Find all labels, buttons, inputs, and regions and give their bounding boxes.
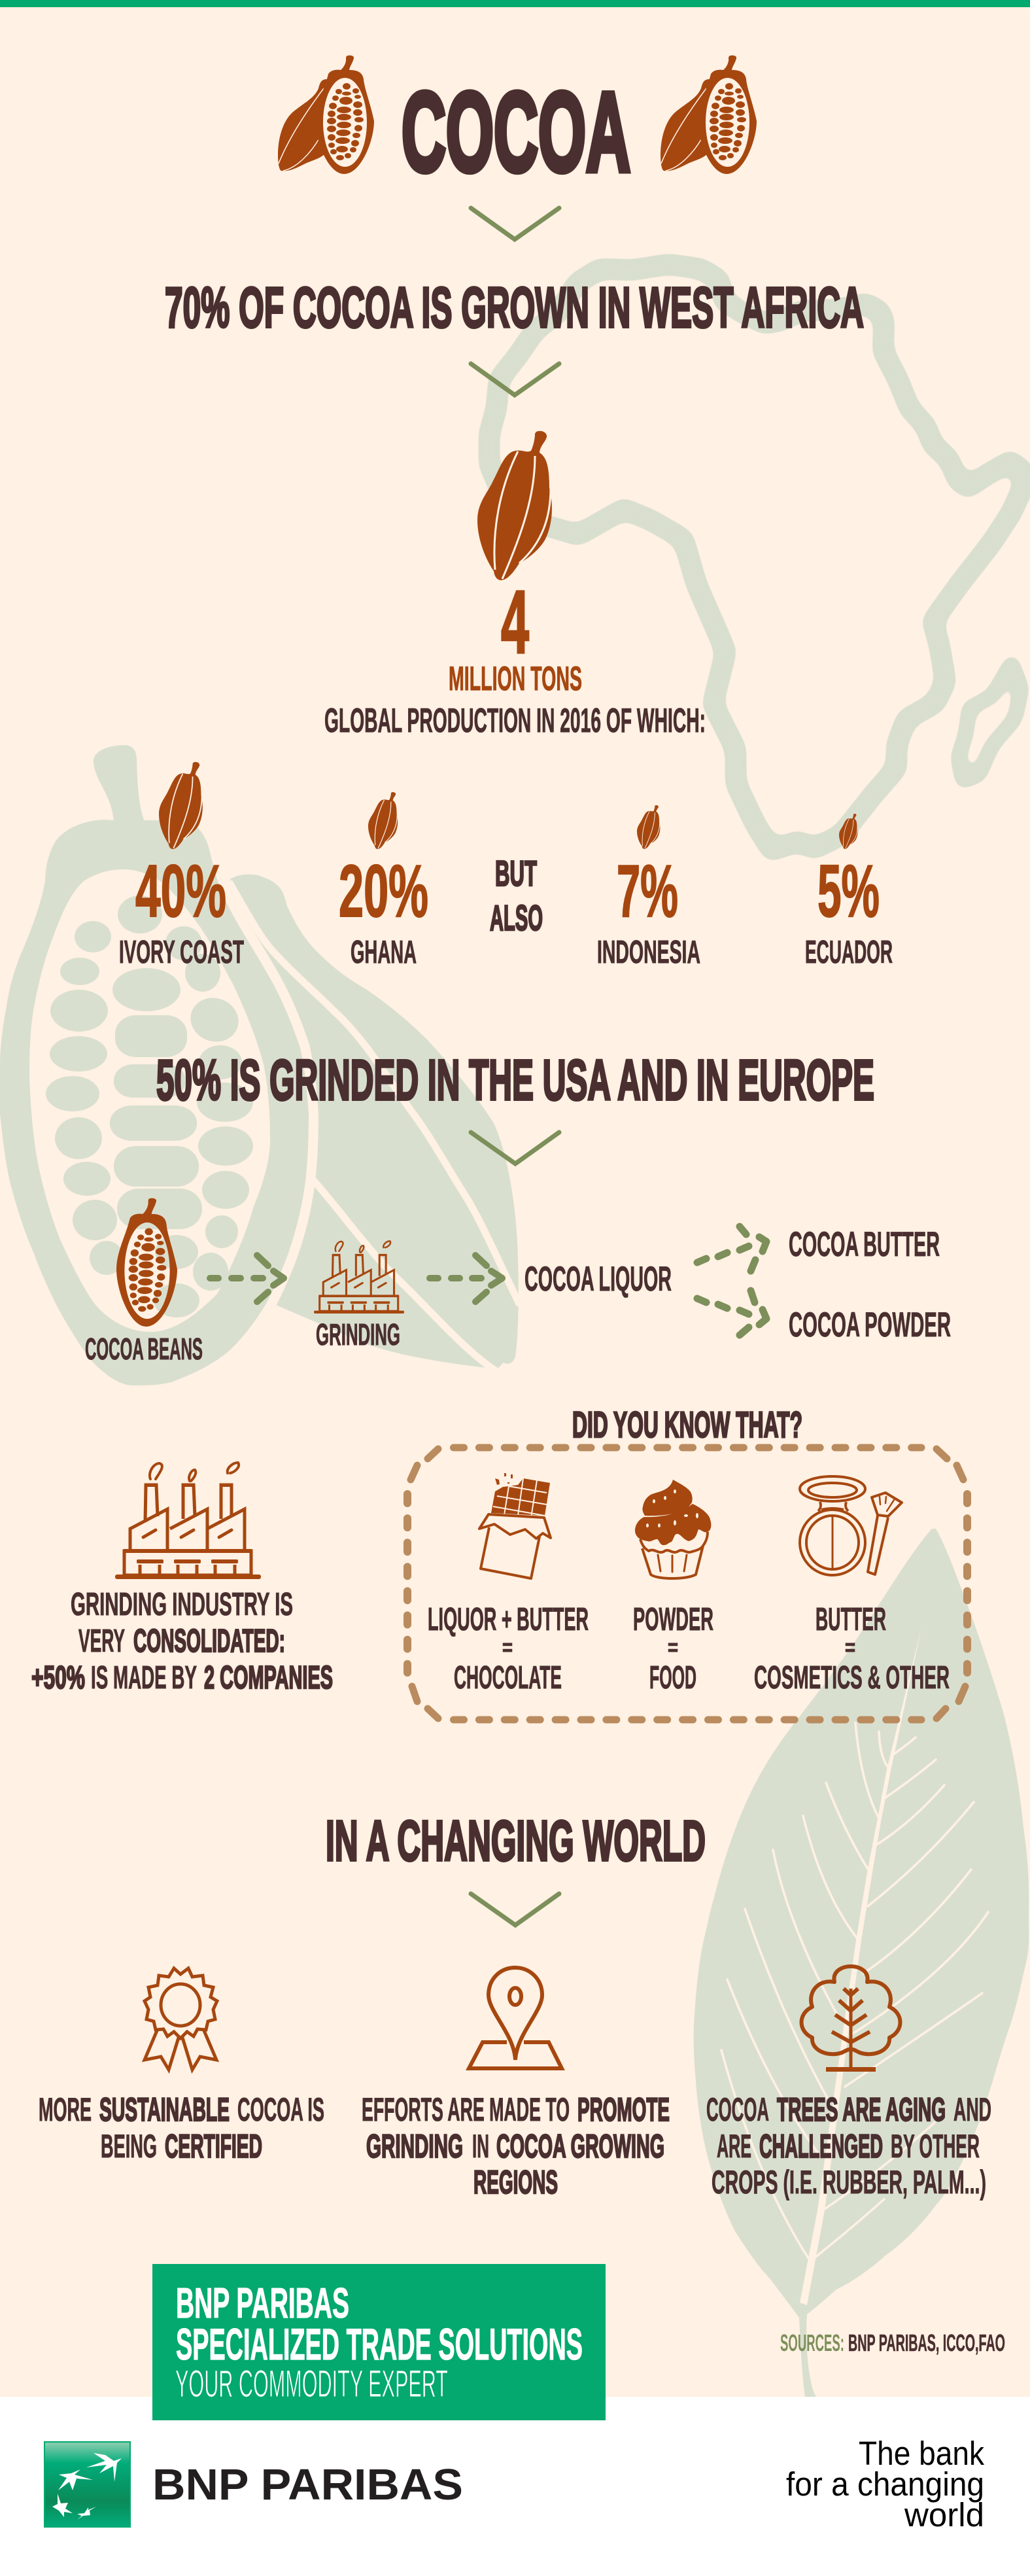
BNP Paribas logo mark bbox=[44, 2442, 130, 2527]
global production stat: MILLION TONS bbox=[449, 660, 582, 698]
text: promote grinding: GRINDING bbox=[366, 2128, 463, 2165]
country: Ecuador bbox=[805, 814, 893, 970]
green panel: specialized trade solutions: SPECIALIZED TRADE SOLUTIONS bbox=[176, 2320, 583, 2369]
icon: certification ribbon bbox=[145, 1968, 217, 2070]
but also label: ALSO bbox=[490, 897, 543, 938]
country: Ghana: GHANA bbox=[351, 935, 417, 970]
grinding industry text: VERY bbox=[78, 1624, 125, 1659]
country: Ecuador: ECUADOR bbox=[805, 935, 893, 970]
icon: closed cocoa pod large bbox=[477, 431, 552, 580]
process: grinding bbox=[314, 1241, 404, 1351]
did-you-know column: chocolate: LIQUOR + BUTTER bbox=[428, 1602, 589, 1637]
country: Indonesia: 7% bbox=[617, 850, 678, 932]
background map of Africa bbox=[489, 264, 1025, 850]
text: sustainable cocoa: COCOA IS bbox=[237, 2091, 324, 2128]
background leaf bbox=[694, 1529, 1029, 2397]
text: aging trees bbox=[706, 2091, 991, 2201]
sources bbox=[780, 2329, 1005, 2356]
did-you-know column: food: POWDER bbox=[633, 1602, 713, 1637]
chevron arrow 4 bbox=[471, 1894, 559, 1925]
text: sustainable cocoa: SUSTAINABLE bbox=[99, 2091, 230, 2128]
top green bar bbox=[0, 0, 1030, 7]
did-you-know column: food: FOOD bbox=[649, 1660, 696, 1696]
but also label bbox=[490, 853, 543, 938]
country: Ghana: 20% bbox=[339, 850, 428, 932]
global production stat: 4 bbox=[501, 572, 529, 672]
country: Ghana bbox=[339, 792, 428, 970]
text: sustainable cocoa: BEING bbox=[101, 2128, 157, 2165]
text: aging trees: AND bbox=[953, 2091, 991, 2128]
tagline: for a changing bbox=[786, 2465, 984, 2503]
country: Ivory Coast bbox=[119, 762, 244, 970]
global production stat: GLOBAL PRODUCTION IN 2016 OF WHICH: bbox=[324, 702, 706, 740]
chevron arrow 2 bbox=[471, 364, 559, 395]
text: promote grinding: COCOA GROWING bbox=[496, 2128, 664, 2165]
text: promote grinding: EFFORTS ARE MADE TO bbox=[362, 2091, 570, 2128]
did-you-know column: food: = bbox=[668, 1635, 678, 1660]
green panel: specialized trade solutions: BNP PARIBAS bbox=[176, 2279, 349, 2327]
tagline: The bank bbox=[859, 2435, 984, 2472]
icon: compact and brush bbox=[800, 1476, 902, 1575]
text: promote grinding: PROMOTE bbox=[577, 2091, 670, 2128]
green panel: specialized trade solutions bbox=[152, 2264, 606, 2420]
text: sustainable cocoa: MORE bbox=[39, 2091, 92, 2128]
footer white band bbox=[0, 2397, 1030, 2576]
icon: location pin bbox=[469, 1968, 562, 2068]
grinding industry text: CONSOLIDATED: bbox=[133, 1624, 285, 1659]
did-you-know column: cosmetics: BUTTER bbox=[815, 1602, 886, 1637]
grinding industry text: +50% bbox=[31, 1660, 85, 1696]
country: Indonesia bbox=[597, 805, 700, 970]
title: COCOA bbox=[402, 69, 630, 195]
icon: chocolate bar bbox=[479, 1473, 551, 1578]
arrow: liquor to butter bbox=[697, 1227, 766, 1271]
grinding industry text: GRINDING INDUSTRY IS bbox=[71, 1587, 293, 1622]
text: sustainable cocoa: CERTIFIED bbox=[165, 2128, 262, 2165]
text: aging trees: ARE bbox=[717, 2128, 751, 2165]
country: Ivory Coast: IVORY COAST bbox=[119, 935, 244, 970]
grinding industry text: 2 COMPANIES bbox=[204, 1660, 333, 1696]
green panel: specialized trade solutions: YOUR COMMODITY EXPERT bbox=[175, 2363, 448, 2405]
grinding industry text bbox=[31, 1587, 333, 1696]
dashed panel border bbox=[407, 1448, 967, 1720]
icon: title cocoa pod right bbox=[661, 56, 757, 174]
tagline: world bbox=[904, 2496, 984, 2533]
process: grinding: GRINDING bbox=[316, 1317, 400, 1351]
did you know heading: DID YOU KNOW THAT? bbox=[572, 1404, 802, 1445]
did-you-know column: food bbox=[633, 1602, 713, 1696]
icon: title cocoa pod left bbox=[278, 56, 374, 174]
icon: factory large bbox=[115, 1463, 261, 1579]
text: sustainable cocoa bbox=[39, 2091, 324, 2165]
icon: cupcake bbox=[635, 1480, 711, 1578]
text: aging trees: CHALLENGED bbox=[759, 2128, 883, 2165]
process: cocoa liquor: COCOA LIQUOR bbox=[524, 1260, 672, 1298]
tagline bbox=[786, 2435, 984, 2533]
did-you-know column: chocolate: CHOCOLATE bbox=[454, 1660, 562, 1696]
global production stat bbox=[324, 572, 706, 740]
arrow: beans to grinding bbox=[210, 1255, 284, 1302]
text: aging trees: COCOA bbox=[706, 2091, 769, 2128]
arrow: liquor to powder bbox=[697, 1291, 766, 1335]
did-you-know column: cosmetics: = bbox=[845, 1635, 855, 1660]
icon: tree bbox=[802, 1966, 900, 2072]
text: promote grinding bbox=[362, 2091, 670, 2201]
did-you-know column: chocolate: = bbox=[502, 1635, 513, 1660]
BNP Paribas wordmark: BNP PARIBAS bbox=[152, 2460, 463, 2509]
country: Ivory Coast: 40% bbox=[135, 850, 226, 932]
sources: SOURCES: bbox=[780, 2329, 844, 2356]
arrow: grinding to liquor bbox=[430, 1255, 502, 1302]
grinding industry text: IS MADE BY bbox=[91, 1660, 197, 1696]
did-you-know column: cosmetics bbox=[754, 1602, 950, 1696]
text: promote grinding: REGIONS bbox=[473, 2164, 558, 2201]
process: cocoa beans: COCOA BEANS bbox=[85, 1332, 203, 1366]
country: Indonesia: INDONESIA bbox=[597, 935, 700, 970]
did-you-know column: chocolate bbox=[428, 1602, 589, 1696]
chevron arrow 3 bbox=[471, 1132, 559, 1164]
background large cocoa pod bbox=[0, 745, 520, 1385]
but also label: BUT bbox=[495, 853, 537, 894]
heading: changing world: IN A CHANGING WORLD bbox=[326, 1809, 706, 1873]
country: Ecuador: 5% bbox=[817, 850, 880, 932]
text: promote grinding: IN bbox=[472, 2128, 489, 2165]
chevron arrow 1 bbox=[471, 208, 559, 239]
process: cocoa beans bbox=[85, 1198, 203, 1366]
